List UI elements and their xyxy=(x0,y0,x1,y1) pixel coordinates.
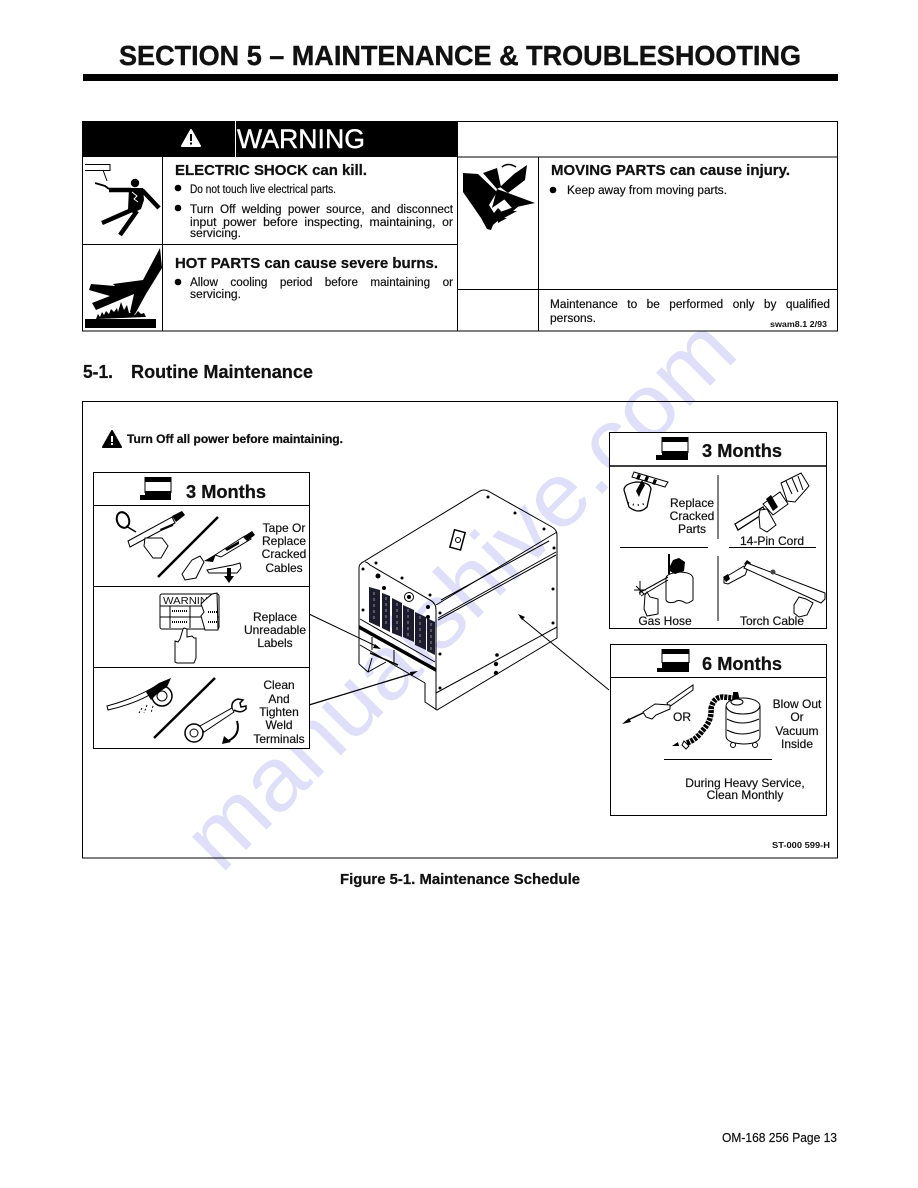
label: replace cracked parts xyxy=(670,496,714,536)
label: tape or replace: Replace xyxy=(262,534,306,548)
icon: 14-pin cord xyxy=(735,473,809,532)
page number: OM-168 256 Page 13 xyxy=(722,1131,837,1145)
title: SECTION 5 – MAINTENANCE & TROUBLESHOOTING xyxy=(119,40,801,71)
label: heavy service xyxy=(685,776,805,802)
icon: clean and tighten xyxy=(107,678,246,744)
label: replace cracked parts: Cracked xyxy=(670,509,714,523)
label: tape or replace: Tape Or xyxy=(263,521,305,535)
label: tape or replace: Cables xyxy=(265,561,303,575)
heading: 6 months: 6 Months xyxy=(702,653,782,674)
label: heavy service: Clean Monthly xyxy=(707,788,783,802)
electric shock text: Do not touch live electrical parts. xyxy=(190,184,336,196)
icon: tape or replace cables xyxy=(115,510,255,583)
electric shock text: input power before inspecting, maintaining, or xyxy=(190,217,453,229)
icon: hot parts xyxy=(85,248,162,328)
label: tape or replace xyxy=(262,521,306,575)
panel: warning table xyxy=(82,121,838,331)
title rule xyxy=(83,74,838,81)
leader arrows xyxy=(309,614,609,705)
qualified persons note: persons. xyxy=(550,313,596,325)
section heading: 5-1. xyxy=(83,361,113,382)
section heading: Routine Maintenance xyxy=(131,361,313,382)
moving parts text: Keep away from moving parts. xyxy=(567,185,727,197)
heading: 3 months: 3 Months xyxy=(702,440,782,461)
moving parts text xyxy=(550,162,790,197)
qualified persons note: swam8.1 2/93 xyxy=(770,320,828,329)
label: replace labels: Unreadable xyxy=(244,623,306,637)
panel: figure frame xyxy=(82,402,838,858)
hot parts text xyxy=(175,255,453,301)
icon: cracked parts xyxy=(624,472,668,511)
warning header bar: WARNING xyxy=(237,124,365,154)
label: clean and tighten: Tighten xyxy=(259,705,299,719)
label: clean and tighten: Clean xyxy=(263,678,295,692)
label: clean and tighten xyxy=(253,678,305,746)
label: or: OR xyxy=(673,710,691,724)
icon: electric shock xyxy=(85,164,159,235)
electric shock text: ELECTRIC SHOCK can kill. xyxy=(175,162,367,179)
label: replace cracked parts: Parts xyxy=(678,522,706,536)
label: blow out: Inside xyxy=(781,737,813,751)
label: replace labels: Labels xyxy=(257,636,293,650)
label: gas hose: Gas Hose xyxy=(638,614,692,628)
icon: calendar xyxy=(657,649,689,672)
panel: 3 months right xyxy=(609,432,827,628)
qualified persons note xyxy=(550,299,830,329)
label: replace cracked parts: Replace xyxy=(670,496,714,510)
label: blow out: Blow Out xyxy=(773,697,822,711)
illustration: welding machine xyxy=(359,490,557,710)
label: replace labels: Replace xyxy=(253,610,297,624)
icon: gas hose xyxy=(634,554,693,616)
icon: calendar xyxy=(656,437,688,460)
label: clean and tighten: Weld xyxy=(265,718,293,732)
icon: moving parts xyxy=(463,164,535,230)
label: blow out: Vacuum xyxy=(775,724,819,738)
watermark: manualshive.com xyxy=(164,299,755,889)
electric shock text: Turn Off welding power source, and disconnect xyxy=(190,204,454,216)
label: 14-pin cord: 14-Pin Cord xyxy=(740,534,804,548)
panel: 6 months xyxy=(610,644,827,816)
warning header bar xyxy=(82,121,458,157)
hot parts text: servicing. xyxy=(190,289,241,301)
label: heavy service: During Heavy Service, xyxy=(685,776,805,790)
label: replace labels xyxy=(244,610,306,650)
icon: warning label: WARNIN xyxy=(163,596,208,607)
caution note xyxy=(103,431,343,447)
qualified persons note: Maintenance to be performed only by qualified xyxy=(550,299,830,311)
label: blow out xyxy=(773,697,822,751)
panel: 3 months left xyxy=(93,472,310,748)
caution note: Turn Off all power before maintaining. xyxy=(127,434,343,446)
icon: calendar xyxy=(140,477,171,500)
icon: warning label xyxy=(160,593,219,663)
label: clean and tighten: And xyxy=(268,692,290,706)
machine vents xyxy=(369,587,435,655)
moving parts text: MOVING PARTS can cause injury. xyxy=(551,162,790,179)
hot parts text: Allow cooling period before maintaining or xyxy=(190,277,453,289)
electric shock text: servicing. xyxy=(190,228,241,240)
icon: torch cable xyxy=(723,560,825,617)
label: torch cable: Torch Cable xyxy=(740,614,804,628)
icon: blow out gun xyxy=(622,685,693,724)
label: clean and tighten: Terminals xyxy=(253,732,305,746)
icon: vacuum xyxy=(672,692,760,749)
label: blow out: Or xyxy=(790,710,804,724)
hot parts text: HOT PARTS can cause severe burns. xyxy=(175,255,438,272)
electric shock text xyxy=(175,162,454,240)
label: tape or replace: Cracked xyxy=(262,547,306,561)
figure caption: Figure 5-1. Maintenance Schedule xyxy=(340,872,580,888)
heading: 3 months: 3 Months xyxy=(186,481,266,502)
figure code: ST-000 599-H xyxy=(772,840,830,850)
